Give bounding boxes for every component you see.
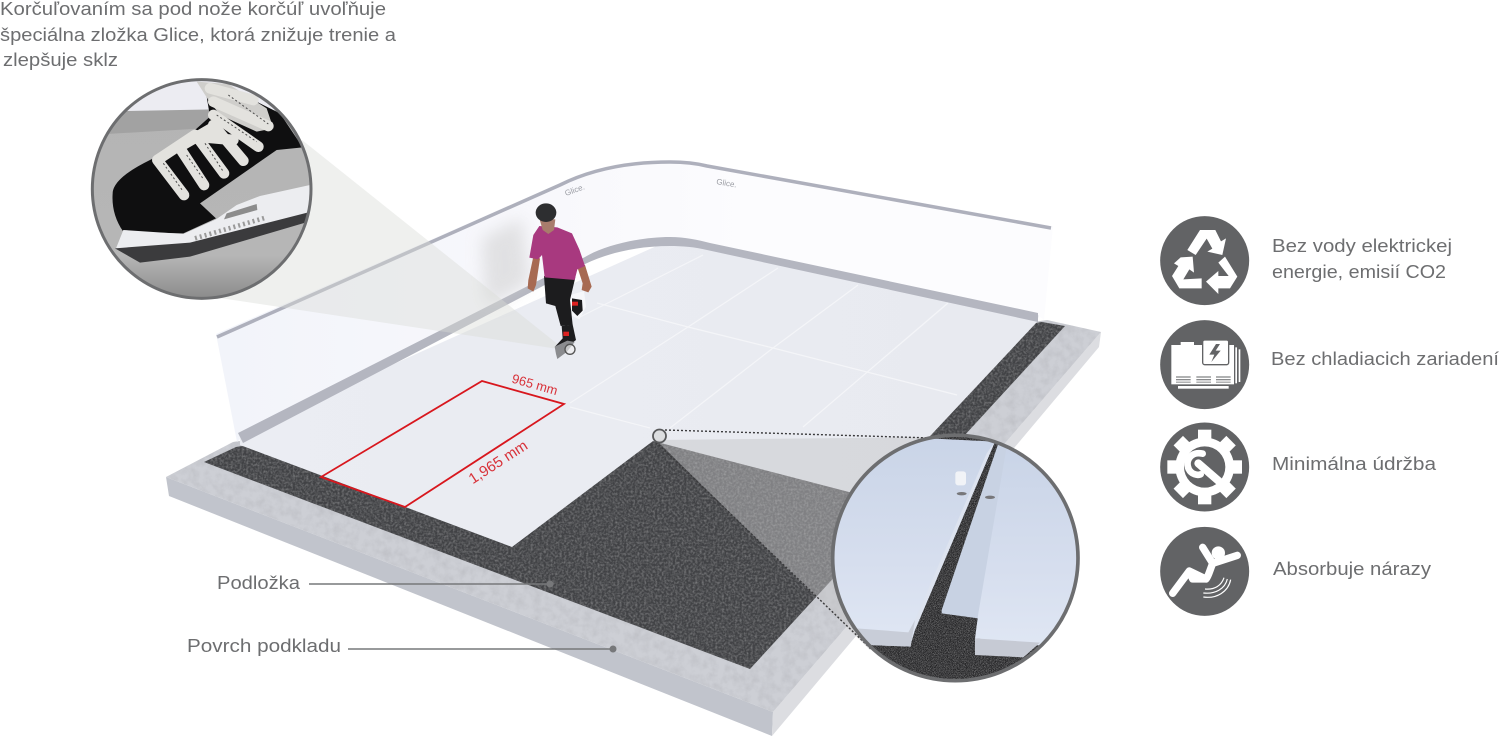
right rear panel — [942, 443, 1008, 618]
heading: skate glide text: zlepšuje sklz — [3, 49, 118, 70]
heading: skate glide text — [0, 0, 397, 70]
barrier base band — [238, 237, 1038, 443]
icon: generator — [1160, 320, 1249, 409]
concrete base slab — [166, 320, 1101, 736]
speckled underlay — [872, 437, 1039, 679]
wall logos — [564, 177, 737, 198]
benefit: no water, electricity, emissions: energie, emisií CO2 — [1272, 261, 1446, 282]
benefit: absorbs impacts — [1160, 527, 1432, 616]
steel blade — [115, 213, 307, 263]
location ring — [565, 344, 575, 354]
detail lens: skate — [90, 78, 313, 300]
helmet — [536, 203, 556, 222]
face — [539, 218, 555, 234]
benefit: no water, electricity, emissions — [1160, 216, 1452, 305]
rink barrier wall — [216, 160, 1053, 442]
right front panel — [975, 447, 1080, 650]
skate boot — [112, 92, 303, 233]
holder vents — [195, 217, 267, 238]
dowel holes — [957, 492, 967, 495]
dark underlay mat — [204, 322, 1065, 669]
lens background — [94, 110, 310, 297]
beam from skate to detail lens — [220, 140, 565, 350]
dotted guide lines — [656, 430, 932, 650]
blade holder — [116, 185, 310, 250]
label: Podložka: Podložka — [217, 572, 301, 593]
callout wedge to joint lens — [656, 437, 945, 650]
benefit: minimal maintenance — [1160, 422, 1437, 511]
label: Povrch podkladu: Povrch podkladu — [187, 635, 341, 656]
benefit: absorbs impacts: Absorbuje nárazy — [1273, 558, 1432, 579]
laces — [157, 88, 268, 195]
arms — [528, 257, 540, 292]
left panel edge — [857, 620, 915, 647]
wall logos: Glice. — [716, 177, 737, 190]
benefit: minimal maintenance: Minimálna údržba — [1272, 453, 1437, 474]
label: Povrch podkladu — [187, 635, 616, 656]
shirt — [529, 226, 585, 280]
wall logos: Glice. — [564, 182, 586, 198]
lens border — [833, 435, 1078, 681]
rear skate — [569, 291, 586, 319]
benefit: no cooling equipment: Bez chladiacich zariadení — [1271, 348, 1500, 369]
label: Podložka — [217, 572, 554, 593]
detail lens: panel joint — [830, 433, 1080, 683]
front skate — [555, 325, 576, 349]
plastic dowel — [955, 471, 966, 485]
white floor panels — [240, 240, 1040, 547]
lace pile — [197, 82, 273, 132]
left panel side strip — [911, 442, 995, 630]
benefit: no cooling equipment — [1160, 320, 1500, 409]
floor panel joints — [570, 255, 957, 428]
icon: falling figure — [1160, 527, 1249, 616]
rink illustration — [166, 140, 1101, 736]
heading: skate glide text: špeciálna zložka Glice, ktorá znižuje trenie a — [0, 24, 397, 45]
icon: recycle — [1160, 216, 1249, 305]
icon: gear and wrench — [1160, 422, 1249, 511]
barrier top edge — [217, 162, 1051, 337]
skater figure — [528, 203, 592, 359]
trousers — [544, 276, 575, 326]
benefit: no water, electricity, emissions: Bez vody elektrickej — [1272, 235, 1452, 256]
joint location ring — [653, 430, 666, 442]
red panel outline — [321, 371, 564, 507]
lace stitching — [163, 95, 268, 192]
left panel — [830, 433, 995, 647]
holder slot — [224, 204, 257, 219]
panel width label: 965 mm — [510, 371, 560, 398]
right panel edge — [975, 638, 1040, 657]
wall shadow behind skater — [482, 218, 530, 305]
lens border — [92, 80, 311, 298]
panel length label: 1,965 mm — [466, 437, 531, 488]
